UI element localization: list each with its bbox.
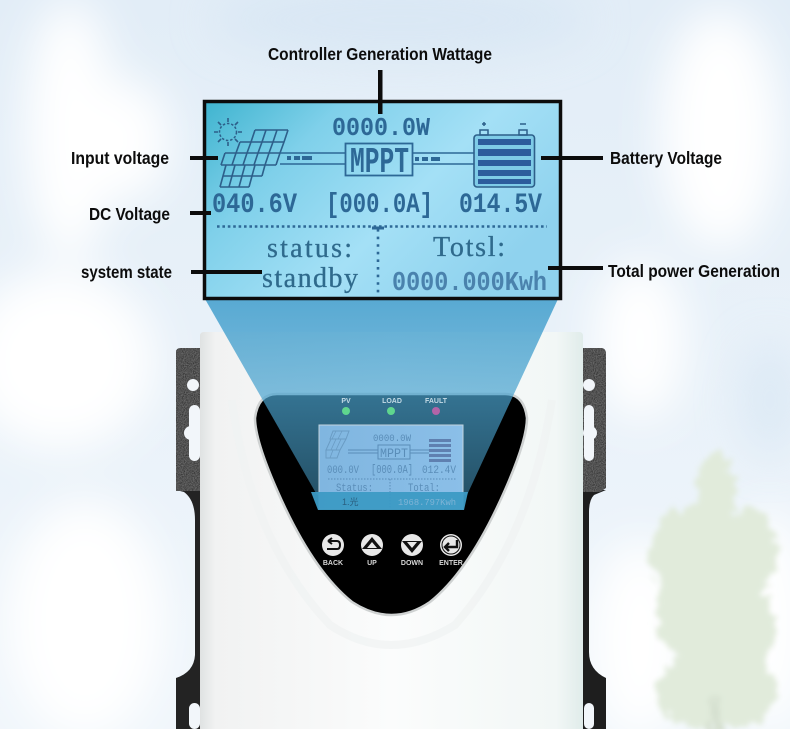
callout: controller generation wattage: [268, 44, 492, 114]
icon: sun: [214, 118, 242, 146]
total generation text: Totsl:: [433, 232, 505, 263]
down button: DOWN: [401, 560, 423, 567]
voltage readings: [000.0A]: [326, 190, 433, 221]
small LCD screen: [319, 425, 463, 509]
small LCD readings: 000.0V: [327, 465, 359, 477]
callout: battery voltage: Battery Voltage: [610, 148, 722, 168]
status text: [262, 233, 358, 294]
wires and flow dashes: [280, 153, 474, 164]
left mounting bracket: [176, 348, 200, 729]
callout: controller generation wattage: Controller Generation Wattage: [268, 44, 492, 64]
enlarged LCD display: [204, 102, 560, 299]
total generation text: [392, 232, 547, 299]
tree: [651, 452, 778, 729]
FAULT indicator: FAULT: [425, 398, 448, 405]
small LCD readings: MPPT: [380, 446, 408, 461]
beam base band on small screen: 1968.797Kwh: [398, 498, 456, 508]
right mounting bracket: [583, 348, 606, 729]
enter button: [439, 534, 463, 567]
LOAD indicator: LOAD: [382, 398, 402, 405]
icon: solar panel: [220, 130, 288, 187]
mounting holes: [184, 379, 200, 729]
MPPT box: MPPT: [350, 142, 409, 183]
controller body: [200, 332, 583, 729]
small LCD readings: [000.0A]: [371, 463, 413, 477]
down button: [401, 534, 423, 567]
icon: battery: [474, 122, 534, 187]
beam base band on small screen: [311, 492, 468, 510]
callout: system state: system state: [81, 262, 172, 282]
status text: status:: [267, 233, 352, 264]
up button: UP: [367, 560, 377, 567]
control buttons: [322, 534, 463, 567]
voltage readings: [212, 190, 542, 221]
small LCD readings: [326, 431, 456, 509]
beam base band on small screen: 1.光: [342, 496, 359, 507]
callout: system state: [81, 262, 262, 282]
small LCD readings: Total:: [408, 483, 440, 495]
small LCD readings: 0000.0W: [373, 434, 411, 445]
callout: input voltage: Input voltage: [71, 148, 169, 168]
PV indicator: PV: [341, 398, 351, 405]
small LCD readings: Status:: [336, 483, 373, 495]
up button: [361, 534, 383, 567]
total generation text: 0000.000Kwh: [392, 269, 547, 299]
indicator lights: [341, 398, 448, 415]
black display panel: [255, 394, 527, 615]
projection beam: [205, 299, 558, 495]
power reading: 0000.0W: [332, 113, 430, 143]
enter button: ENTER: [439, 560, 463, 567]
voltage readings: 014.5V: [459, 190, 542, 221]
dotted dividers: [217, 226, 547, 296]
back button: [322, 534, 344, 567]
status text: standby: [262, 263, 358, 294]
MPPT box: [346, 142, 412, 183]
mounting holes: [583, 379, 597, 729]
callout: battery voltage: [541, 148, 722, 168]
back button: BACK: [323, 560, 343, 567]
voltage readings: 040.6V: [212, 190, 297, 221]
small LCD readings: 012.4V: [422, 465, 456, 477]
callout: DC voltage: DC Voltage: [89, 204, 170, 224]
